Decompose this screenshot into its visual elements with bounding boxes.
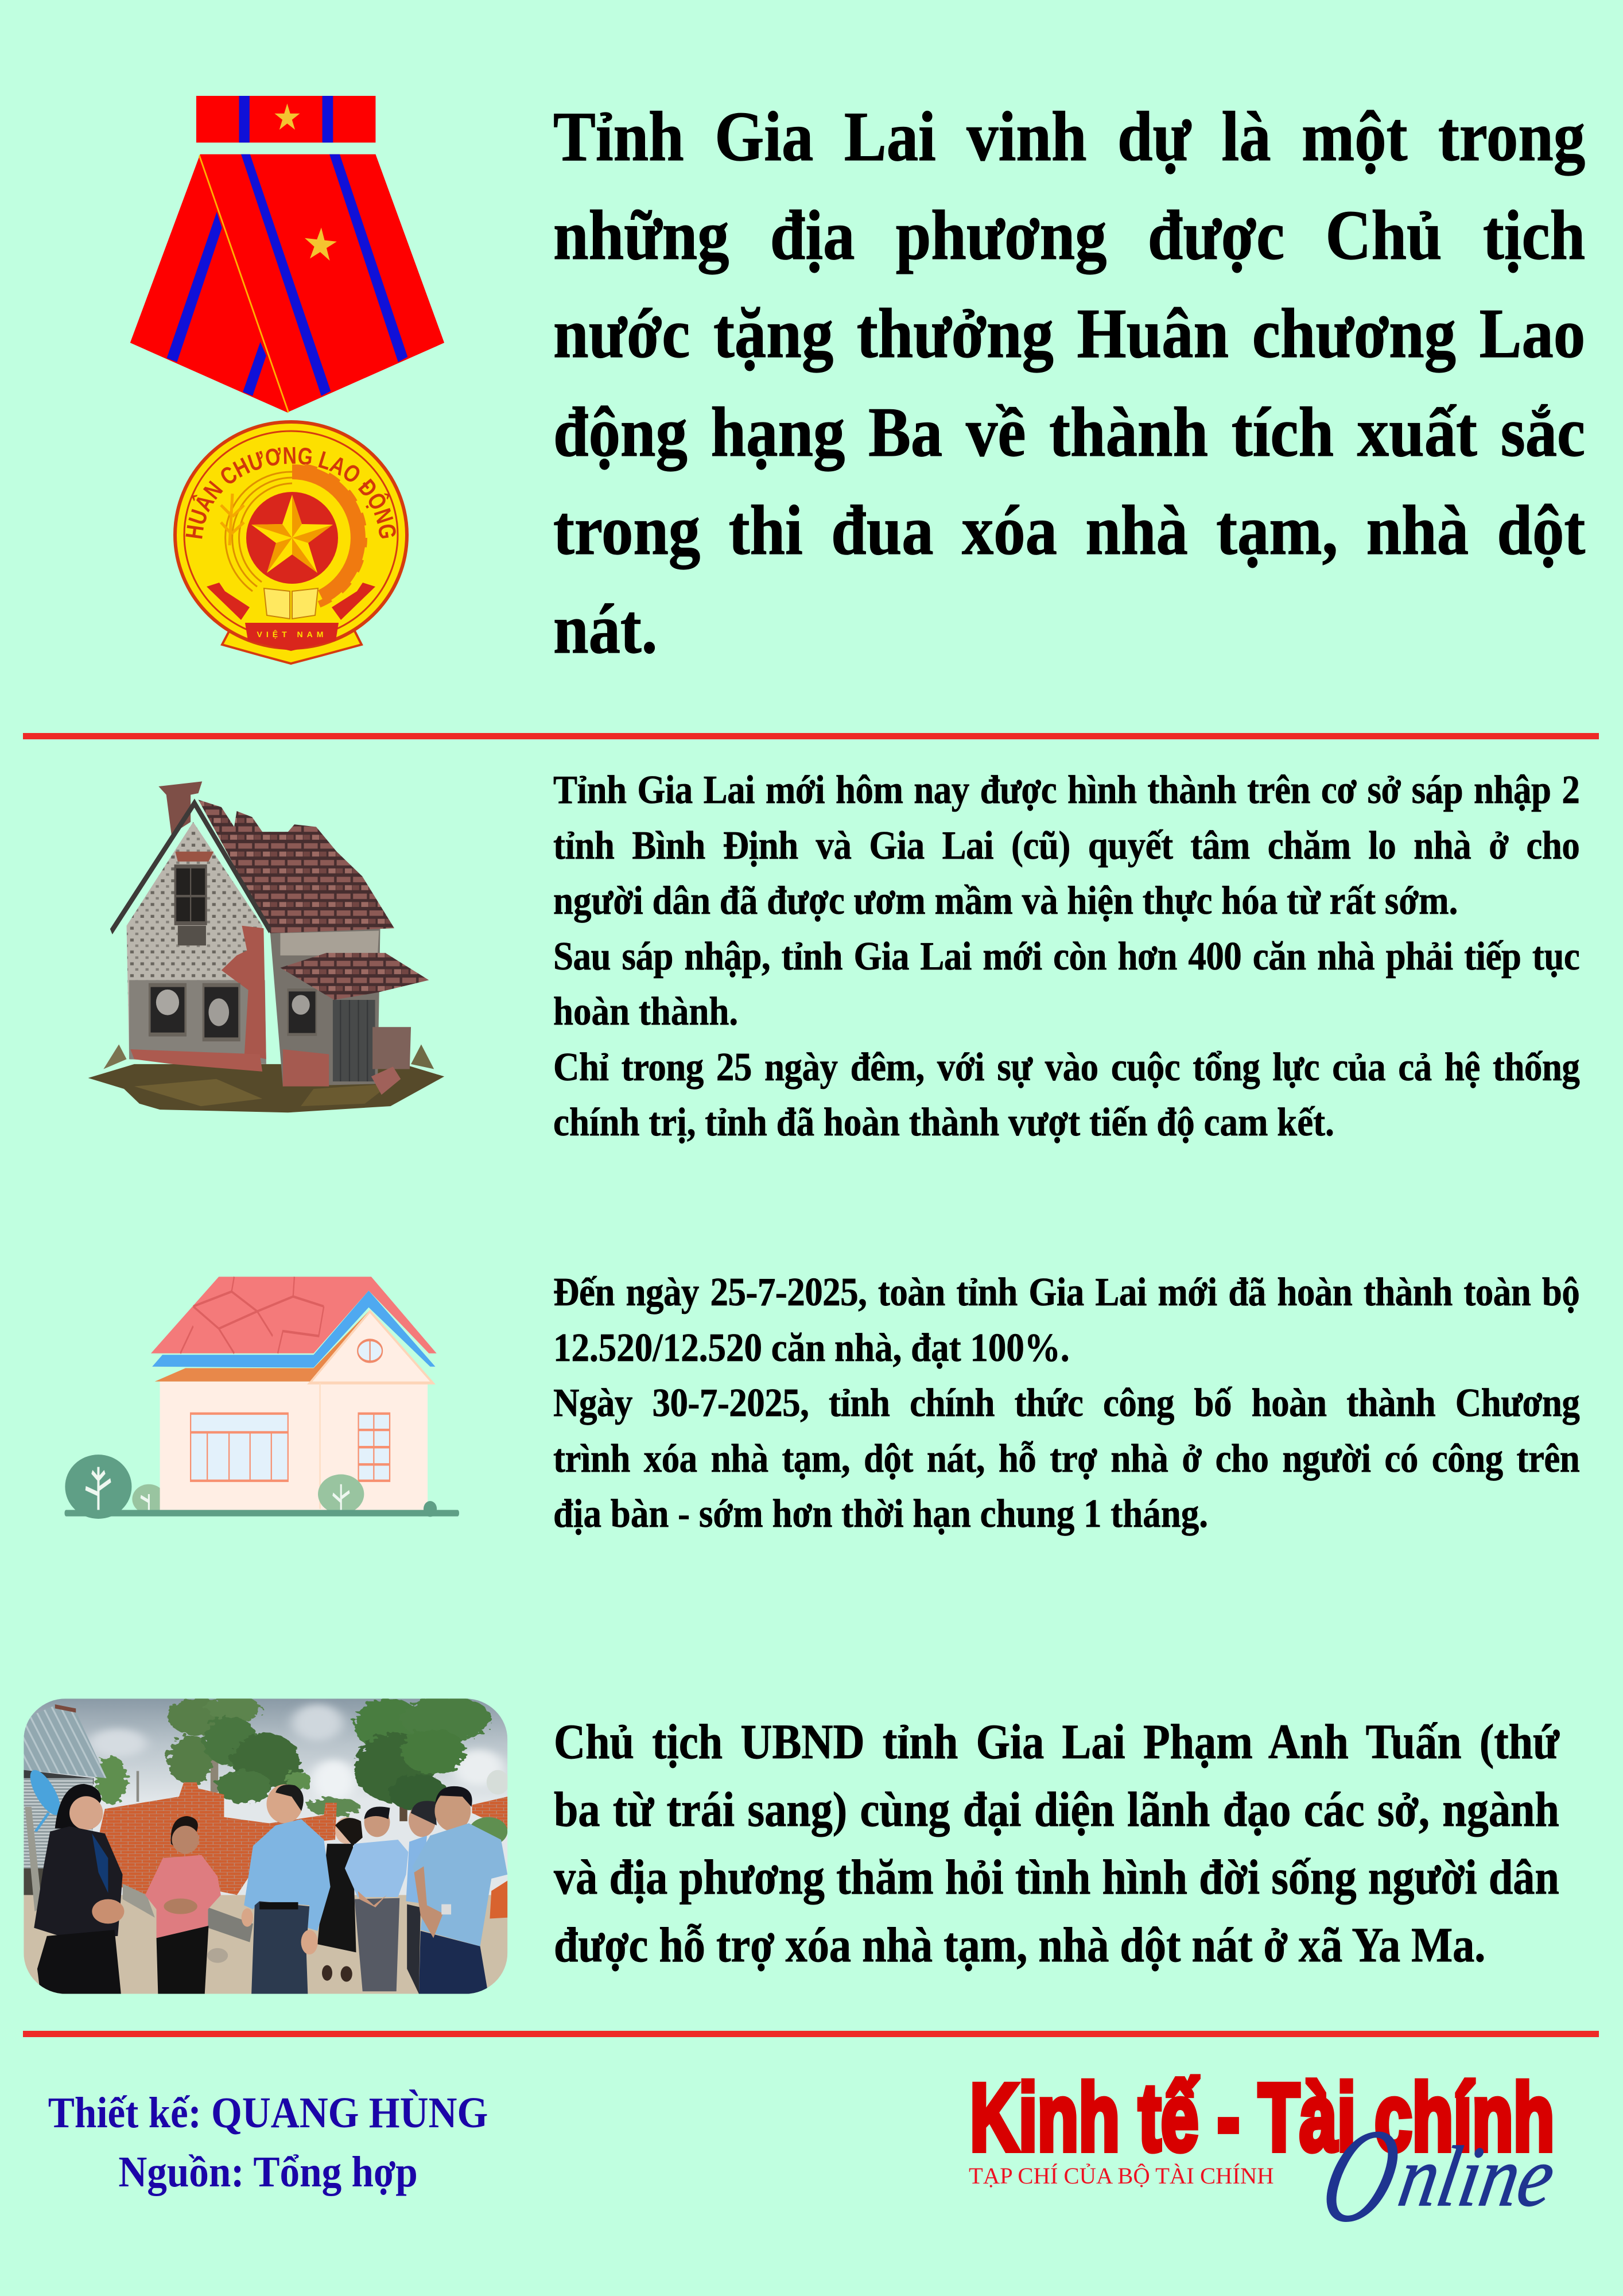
woman in pink shirt <box>145 1816 221 1994</box>
body text: first paragraph <box>553 768 1580 1145</box>
woman in dark suit <box>34 1784 124 1994</box>
title: động hạng Ba về thành tích xuất sắc <box>553 393 1585 471</box>
body text: second paragraph: địa bàn - sớm hơn thời hạn chung 1 tháng. <box>553 1492 1208 1536</box>
logo tagline: TẠP CHÍ CỦA BỘ TÀI CHÍNH <box>969 2163 1274 2189</box>
body text: second paragraph: Đến ngày 25-7-2025, toàn tỉnh Gia Lai mới đã hoàn thành toàn bộ <box>553 1270 1579 1314</box>
body text: first paragraph: Chỉ trong 25 ngày đêm, với sự vào cuộc tổng lực của cả hệ thống <box>553 1045 1579 1089</box>
icon: new house <box>64 1277 459 1519</box>
man in blue shirt, centre <box>242 1785 331 1994</box>
photo caption: Chủ tịch UBND tỉnh Gia Lai Phạm Anh Tuấn (thứ <box>554 1714 1559 1769</box>
title: nước tặng thưởng Huân chương Lao <box>553 294 1585 373</box>
title: nát. <box>553 589 657 668</box>
body text: second paragraph <box>553 1270 1580 1536</box>
trees <box>65 1455 180 1519</box>
body text: second paragraph: Ngày 30-7-2025, tỉnh chính thức công bố hoàn thành Chương <box>553 1381 1579 1425</box>
body text: second paragraph: 12.520/12.520 căn nhà, đạt 100%. <box>553 1326 1070 1370</box>
photo caption <box>553 1714 1560 1972</box>
icon: labor medal with ribbon <box>130 96 444 665</box>
logo wordmark: Kinh tế - Tài chính <box>970 2065 1555 2171</box>
body text: first paragraph: người dân đã được ươm mầm và hiện thực hóa từ rất sớm. <box>553 879 1458 923</box>
icon: dilapidated house <box>88 781 444 1112</box>
body text: first paragraph: Sau sáp nhập, tỉnh Gia Lai mới còn hơn 400 căn nhà phải tiếp tục <box>553 934 1579 978</box>
title <box>553 97 1585 668</box>
logo script word: O <box>1308 2101 1414 2250</box>
brick wall <box>99 1782 507 1942</box>
logo: Kinh tế - Tài chính Online <box>947 2049 1578 2256</box>
windows <box>191 1340 390 1481</box>
woman in black dress <box>317 1817 363 1981</box>
photo caption: ba từ trái sang) cùng đại diện lãnh đạo các sở, ngành <box>554 1782 1559 1837</box>
folded ribbon <box>130 154 444 413</box>
sky and clouds <box>24 1698 507 1903</box>
body text: first paragraph: tỉnh Bình Định và Gia Lai (cũ) quyết tâm chăm lo nhà ở cho <box>553 823 1579 868</box>
body text: first paragraph: Tỉnh Gia Lai mới hôm nay được hình thành trên cơ sở sáp nhập 2 <box>553 768 1579 812</box>
trees <box>96 1696 509 1821</box>
title: những địa phương được Chủ tịch <box>553 195 1585 274</box>
metal-roofed shed <box>24 1704 107 1911</box>
man behind, partly hidden <box>406 1801 437 1994</box>
credits: designer and source: Nguồn: Tổng hợp <box>118 2148 418 2196</box>
body text: second paragraph: trình xóa nhà tạm, dột nát, hỗ trợ nhà ở cho người có công trên <box>553 1436 1579 1481</box>
medallion <box>173 420 409 665</box>
ground <box>24 1895 507 1994</box>
body text: first paragraph: chính trị, tỉnh đã hoàn thành vượt tiến độ cam kết. <box>553 1100 1334 1145</box>
photo caption: được hỗ trợ xóa nhà tạm, nhà dột nát ở xã Ya Ma. <box>554 1917 1485 1972</box>
logo script word: nline <box>1392 2129 1562 2224</box>
credits: designer and source: Thiết kế: QUANG HÙNG <box>48 2089 488 2137</box>
photo: officials visiting residents <box>24 1698 507 1994</box>
title: trong thi đua xóa nhà tạm, nhà dột <box>553 491 1585 569</box>
man at right in blue shirt <box>413 1786 507 1994</box>
medal base text: VIỆT NAM <box>257 629 327 639</box>
credits: designer and source <box>24 2084 512 2202</box>
logo script word <box>1308 2101 1562 2250</box>
body text: first paragraph: hoàn thành. <box>553 990 738 1034</box>
photo caption: và địa phương thăm hỏi tình hình đời sống người dân <box>554 1849 1559 1905</box>
medal inscription: HUÂN CHƯƠNG LAO ĐỘNG <box>186 447 396 538</box>
title: Tỉnh Gia Lai vinh dự là một trong <box>553 97 1585 176</box>
ribbon bar <box>196 96 375 142</box>
man in light blue shirt, rear <box>345 1807 408 1991</box>
